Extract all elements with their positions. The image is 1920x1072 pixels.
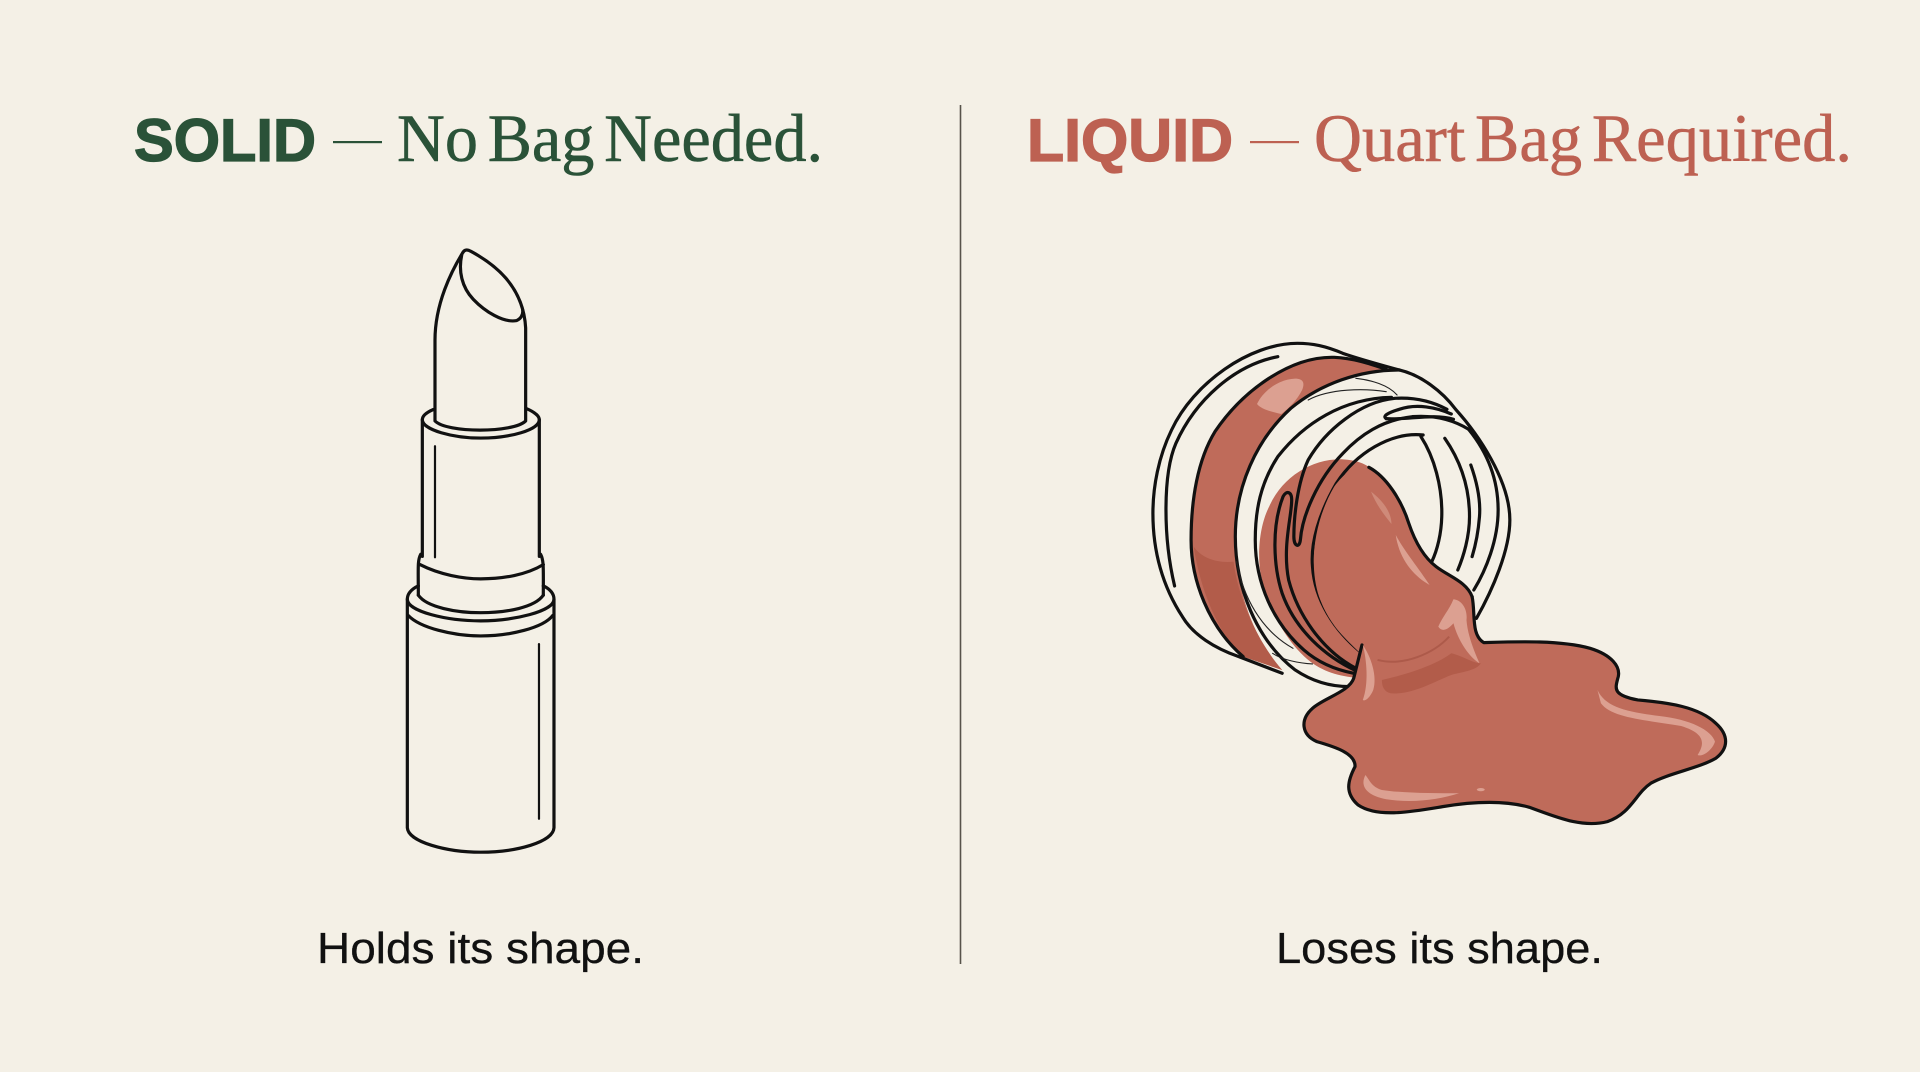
- jar colored band: [1191, 357, 1399, 670]
- caption: solid: Holds its shape.: [317, 924, 644, 973]
- heading: solid: No Bag Needed.: [397, 100, 823, 176]
- caption: liquid: Loses its shape.: [1276, 924, 1603, 973]
- heading: liquid: Quart Bag Required.: [1314, 100, 1852, 176]
- heading: liquid: [1027, 100, 1852, 176]
- jar outer outline: [1153, 343, 1399, 673]
- heading: solid: [134, 100, 823, 176]
- lipstick collar: [422, 409, 539, 557]
- liquid inside jar: [1259, 459, 1382, 678]
- liquid highlights: [1363, 492, 1715, 801]
- lipstick base: [407, 586, 554, 852]
- lipstick middle band: [418, 554, 543, 613]
- lipstick bullet: [435, 250, 526, 430]
- heading: liquid: LIQUID: [1027, 107, 1233, 174]
- icon: tipped jar with spilled liquid: [1153, 343, 1726, 824]
- icon: lipstick: [407, 250, 554, 852]
- spilled liquid puddle: [1304, 467, 1726, 824]
- heading: solid: SOLID: [134, 107, 316, 174]
- center divider: [960, 105, 962, 964]
- jar front rim and threads: [1235, 370, 1510, 687]
